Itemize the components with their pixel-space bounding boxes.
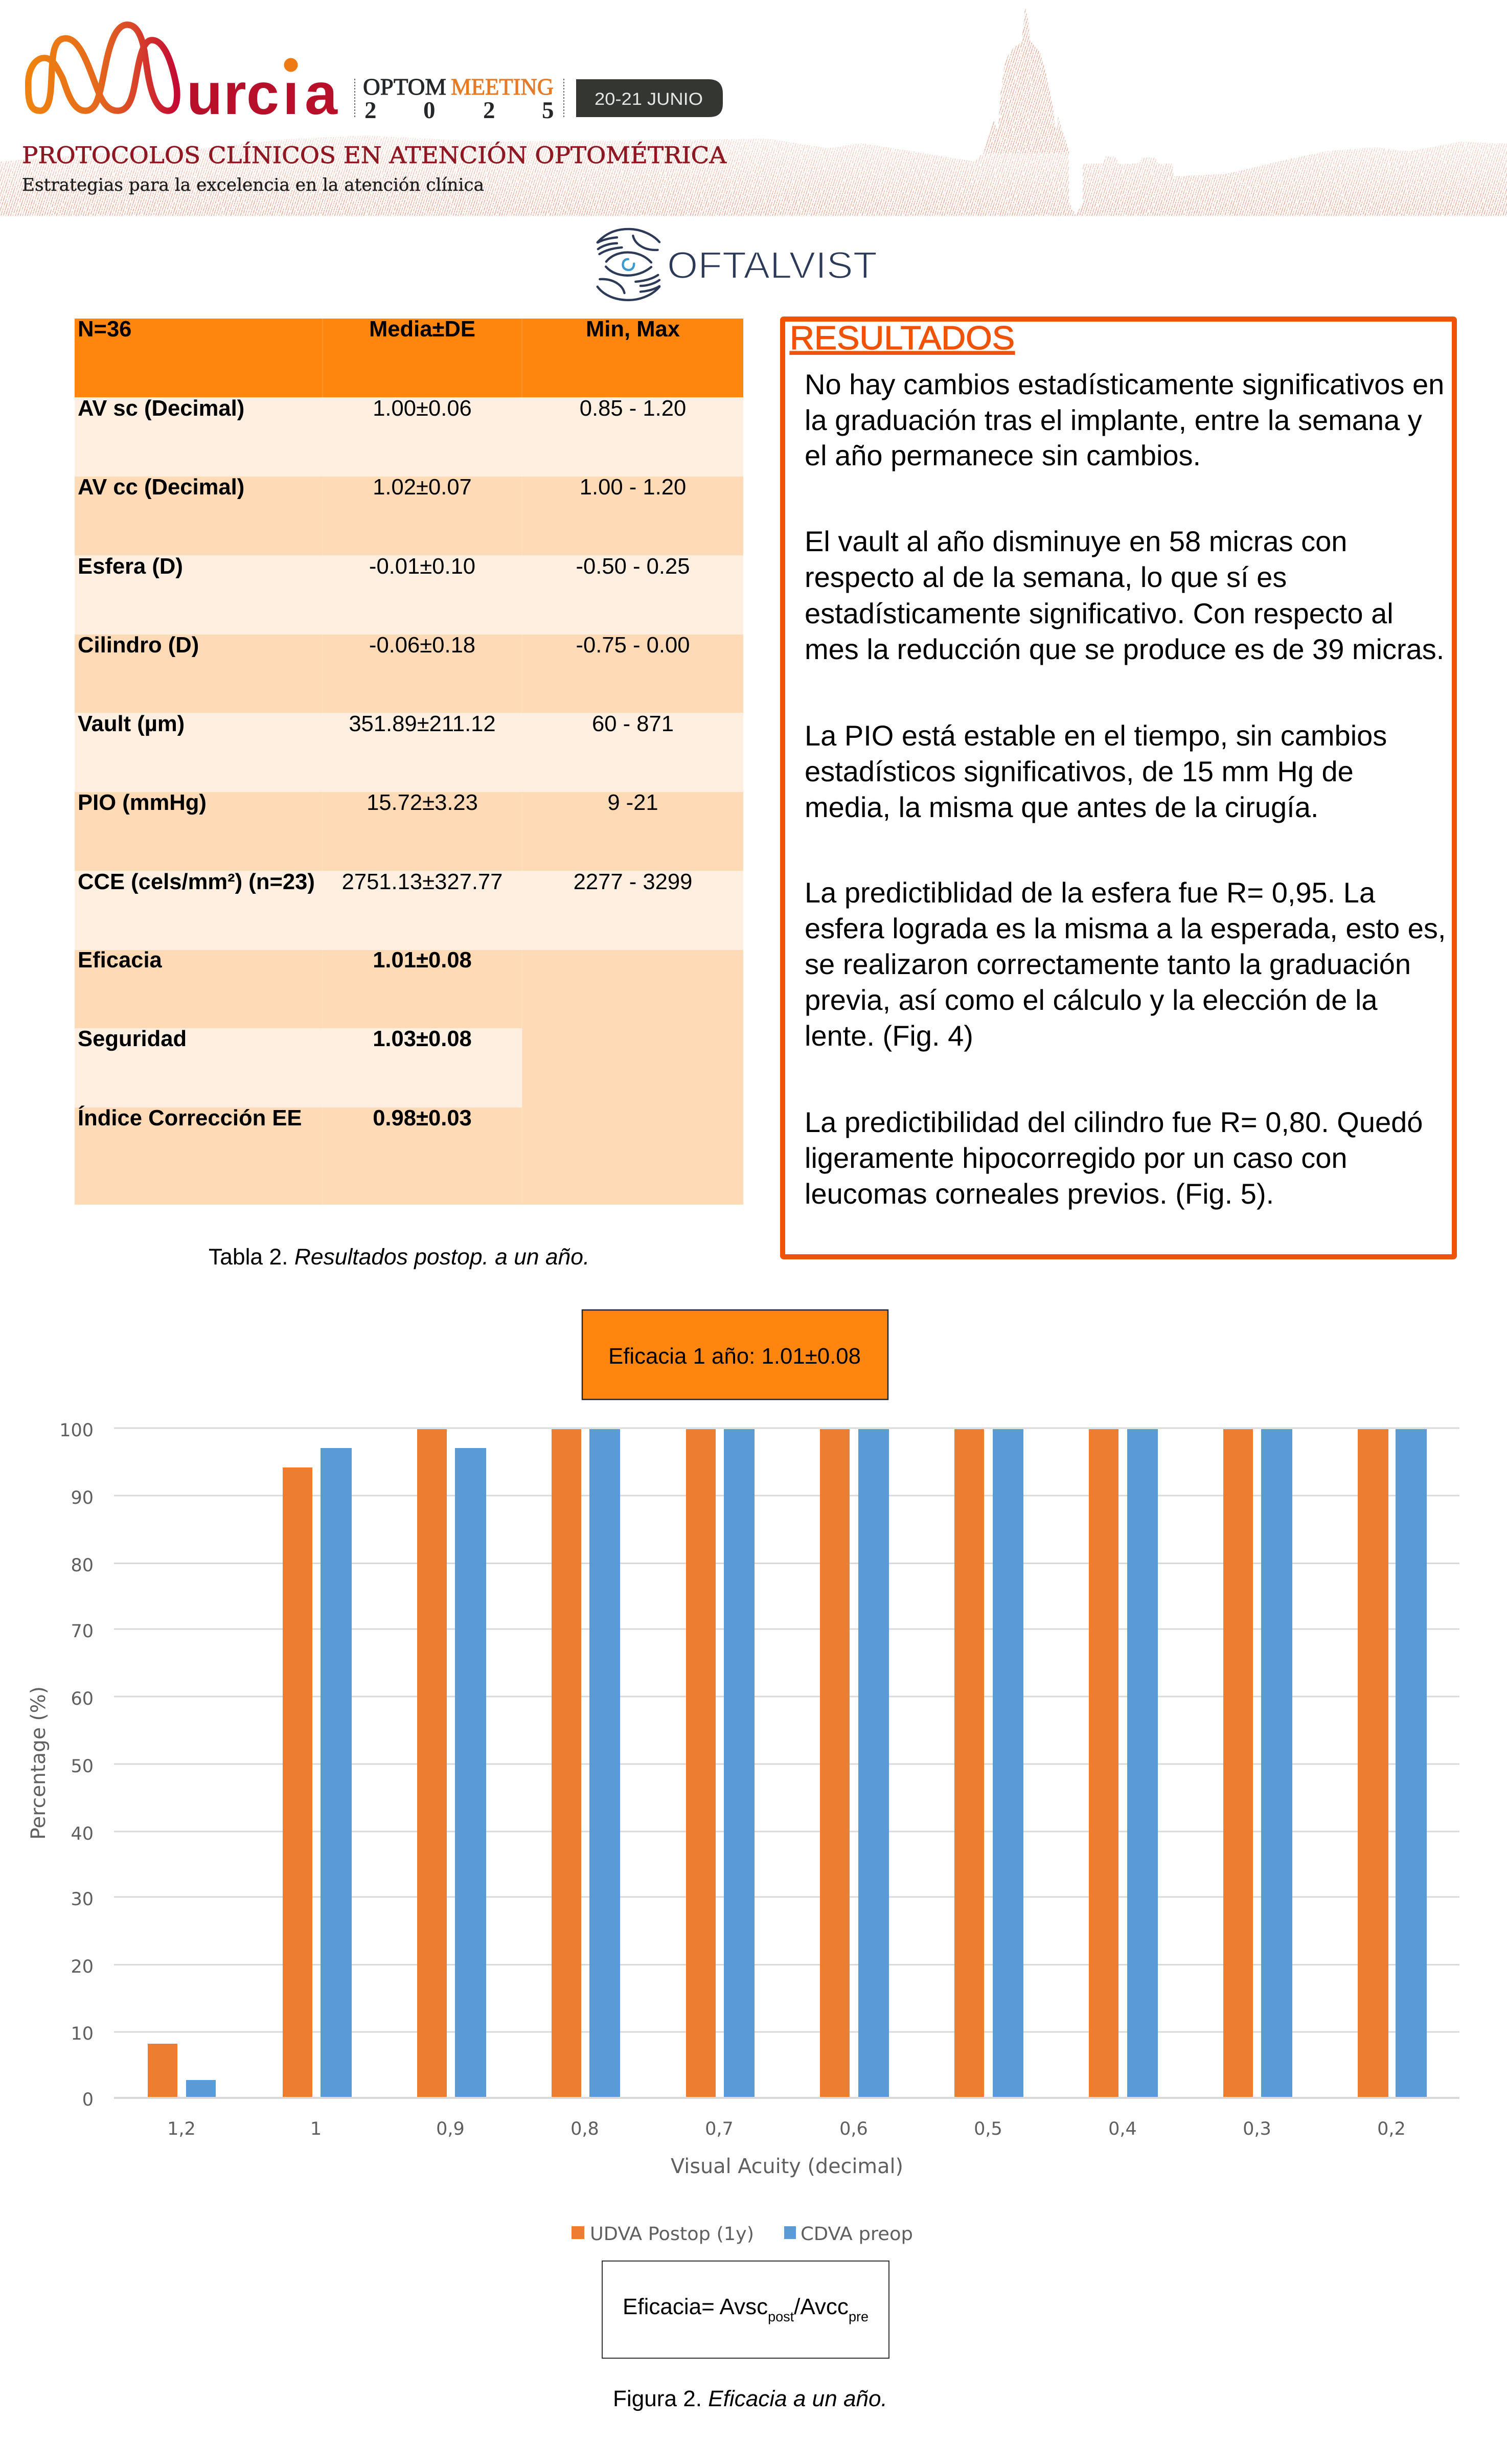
row: PIO: 9 -21: [607, 790, 658, 815]
row: PIO: PIO (mmHg): [78, 790, 207, 815]
row: Seguridad: 1.03±0.08: [373, 1027, 472, 1051]
paragraph: esfera: lente. (Fig. 4): [805, 1020, 973, 1052]
table background: [75, 319, 743, 1205]
row: Esfera: -0.01±0.10: [369, 554, 475, 579]
paragraph: graduacion: No hay cambios estadísticamente significativos en: [805, 368, 1444, 400]
y axis labels: 40: [71, 1824, 94, 1844]
row: CCE: [78, 870, 692, 894]
Meeting: MEETING: [451, 74, 554, 100]
panel: resultados: [783, 319, 1454, 1257]
legend: UDVA Postop (1y): [590, 2224, 754, 2245]
y axis title: Percentage (%): [27, 1686, 50, 1840]
figure caption: Figura 2. Eficacia a un año.: [613, 2386, 887, 2411]
wordmark: OFTALVIST: [667, 244, 877, 286]
logo: Oftalvist: [598, 229, 877, 300]
x axis labels: 0,5: [974, 2119, 1002, 2139]
formula box: pre: [849, 2309, 869, 2324]
Optom: OPTOM: [363, 74, 446, 100]
legend: CDVA preop: [801, 2224, 913, 2245]
header row: Media±DE: [369, 317, 475, 342]
heading: resultados: RESULTADOS: [790, 319, 1015, 356]
row: Seguridad: Seguridad: [78, 1027, 187, 1051]
formula box: post: [768, 2309, 794, 2324]
x axis labels: 1,2: [167, 2119, 196, 2139]
row: Cilindro: -0.75 - 0.00: [576, 633, 690, 658]
formula box: [602, 2261, 889, 2358]
title: Protocolos clínicos: PROTOCOLOS CLÍNICOS EN ATENCIÓN OPTOMÉTRICA: [22, 142, 727, 169]
row: AV sc: 0.85 - 1.20: [580, 396, 686, 421]
row: PIO: [78, 790, 658, 815]
x axis labels: 1: [310, 2119, 322, 2139]
paragraph: vault: El vault al año disminuye en 58 micras con: [805, 525, 1347, 557]
row: Eficacia: [78, 948, 472, 973]
y axis labels: [59, 1420, 94, 2110]
table caption: Tabla 2. Resultados postop. a un año.: [209, 1245, 589, 1270]
paragraph: vault: respecto al de la semana, lo que sí es: [805, 561, 1287, 593]
x axis labels: 0,7: [705, 2119, 734, 2139]
header row: Min, Max: [586, 317, 680, 342]
wordmark: urcia: [187, 61, 338, 127]
date pill: 20-21 JUNIO: [595, 89, 703, 109]
x axis labels: 0,9: [436, 2119, 465, 2139]
x axis labels: 0,2: [1377, 2119, 1406, 2139]
paragraph: esfera: previa, así como el cálculo y la elección de la: [805, 984, 1378, 1016]
row: Indice Correccion EE: 0.98±0.03: [373, 1106, 472, 1131]
row: AV cc: [78, 475, 686, 500]
paragraph: esfera: La predictiblidad de la esfera fue R= 0,95. La: [805, 876, 1376, 909]
legend: [572, 2224, 913, 2245]
row: PIO: 15.72±3.23: [367, 790, 478, 815]
x axis labels: 0,3: [1243, 2119, 1271, 2139]
row: Esfera: [78, 554, 690, 579]
x axis labels: 0,4: [1108, 2119, 1137, 2139]
skyline texture: [0, 6, 1507, 216]
series: CDVA preop: [186, 1429, 1427, 2097]
icon: eye: [598, 229, 659, 300]
row: Indice Correccion EE: Índice Corrección EE: [78, 1105, 302, 1131]
series: UDVA Postop: [148, 1429, 1388, 2097]
paragraph: PIO: estadísticos significativos, de 15 mm Hg de: [805, 755, 1354, 787]
x axis labels: 0,6: [839, 2119, 868, 2139]
row: CCE: 2751.13±327.77: [342, 870, 503, 894]
row: Seguridad: [78, 1027, 472, 1051]
paragraph: esfera: esfera lograda es la misma a la esperada, esto es,: [805, 912, 1446, 944]
y axis labels: 100: [59, 1420, 94, 1441]
row: AV sc: [78, 396, 686, 421]
table: resultados postop: [75, 317, 743, 1205]
paragraph: cilindro: leucomas corneales previos. (Fig. 5).: [805, 1178, 1274, 1210]
grid lines: [114, 1428, 1459, 2099]
paragraph: vault: mes la reducción que se produce es de 39 micras.: [805, 633, 1444, 665]
paragraph: esfera: [805, 876, 1446, 1052]
row: Cilindro: -0.06±0.18: [369, 633, 475, 658]
row: AV sc: AV sc (Decimal): [78, 396, 244, 421]
paragraph: PIO: media, la misma que antes de la cirugía.: [805, 791, 1318, 823]
row: Vault: 351.89±211.12: [349, 712, 496, 736]
icon: i dot: [284, 58, 298, 72]
row: Esfera: Esfera (D): [78, 554, 183, 579]
row: AV sc: 1.00±0.06: [373, 396, 472, 421]
row: Vault: Vault (µm): [78, 712, 185, 736]
formula box: Eficacia= Avsc: [623, 2294, 768, 2319]
row: Cilindro: Cilindro (D): [78, 633, 199, 658]
x axis title: Visual Acuity (decimal): [671, 2155, 903, 2178]
paragraph: graduacion: el año permanece sin cambios.: [805, 439, 1201, 471]
header row: N=36: [78, 317, 131, 342]
row: Vault: [78, 712, 674, 736]
row: AV cc: AV cc (Decimal): [78, 475, 244, 500]
y axis labels: 20: [71, 1957, 94, 1977]
logo: Optom Meeting 2025: [355, 74, 564, 124]
callout: eficacia 1 año: [582, 1310, 888, 1399]
paragraph: graduacion: la graduación tras el implante, entre la semana y: [805, 404, 1422, 436]
date pill: [576, 79, 723, 117]
icon: ribbon M: [28, 25, 177, 111]
row: Vault: 60 - 871: [592, 712, 674, 736]
row: AV cc: 1.00 - 1.20: [580, 475, 686, 500]
row: CCE: CCE (cels/mm²) (n=23): [78, 870, 315, 894]
paragraph: cilindro: ligeramente hipocorregido por un caso con: [805, 1142, 1348, 1174]
paragraph: vault: estadísticamente significativo. Con respecto al: [805, 597, 1394, 629]
y axis labels: 70: [71, 1621, 94, 1642]
formula box: /Avcc: [794, 2294, 849, 2319]
paragraph: cilindro: [805, 1106, 1423, 1210]
row: Eficacia: 1.01±0.08: [373, 948, 472, 973]
paragraph: vault: [805, 525, 1444, 665]
logo: Murcia: [28, 25, 338, 127]
row: Eficacia: Eficacia: [78, 948, 163, 973]
paragraph: cilindro: La predictibilidad del cilindro fue R= 0,80. Quedó: [805, 1106, 1423, 1138]
header row: [78, 317, 680, 342]
paragraph: PIO: La PIO está estable en el tiempo, sin cambios: [805, 719, 1387, 752]
y axis labels: 50: [71, 1756, 94, 1777]
paragraph: esfera: se realizaron correctamente tanto la graduación: [805, 948, 1411, 980]
y axis labels: 80: [71, 1555, 94, 1576]
subtitle: Estrategias para la excelencia en la atención clínica: [22, 175, 484, 195]
row: AV cc: 1.02±0.07: [373, 475, 472, 500]
y axis labels: 30: [71, 1889, 94, 1910]
year: 2025: [364, 97, 554, 124]
callout: eficacia 1 año: Eficacia 1 año: 1.01±0.08: [608, 1344, 861, 1369]
y axis labels: 10: [71, 2024, 94, 2044]
x axis labels: 0,8: [570, 2119, 599, 2139]
y axis labels: 90: [71, 1488, 94, 1508]
y axis labels: 60: [71, 1689, 94, 1709]
x axis labels: [167, 2119, 1406, 2139]
row: Indice Correccion EE: [78, 1105, 472, 1131]
paragraph: PIO: [805, 719, 1387, 823]
header banner: [0, 6, 1507, 216]
row: Cilindro: [78, 633, 690, 658]
row: Esfera: -0.50 - 0.25: [576, 554, 690, 579]
y axis labels: 0: [82, 2090, 94, 2110]
paragraph: graduacion: [805, 368, 1444, 471]
bar chart: eficacia: [27, 1420, 1459, 2245]
row: CCE: 2277 - 3299: [574, 870, 692, 894]
